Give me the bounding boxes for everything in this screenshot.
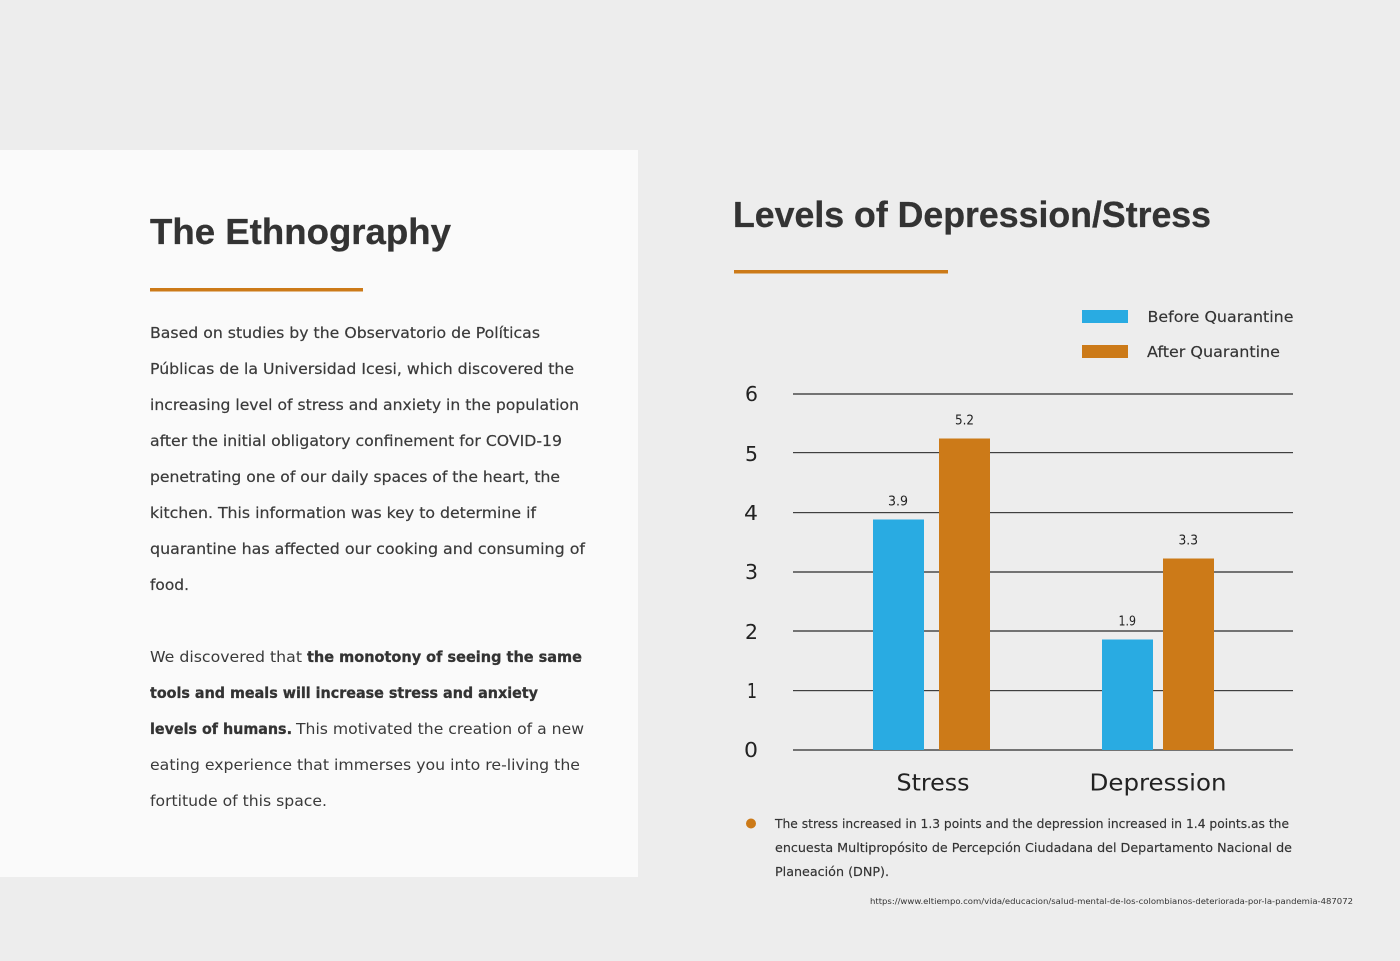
legend: After Quarantine bbox=[1147, 343, 1280, 361]
bars: depression: 3.3 bbox=[1178, 532, 1198, 548]
y axis labels: 4 bbox=[744, 501, 758, 525]
y axis labels: 6 bbox=[745, 382, 758, 406]
text block: first paragraph: Públicas de la Universidad Icesi, which discovered the bbox=[150, 360, 574, 378]
bars: stress: 5.2 bbox=[955, 412, 974, 428]
heading: levels of depression/stress: Levels of Depression/Stress bbox=[733, 194, 1211, 235]
text block: second paragraph: We discovered that bbox=[150, 648, 302, 666]
bars: depression bbox=[1102, 532, 1214, 750]
x axis labels: Depression bbox=[1090, 770, 1226, 796]
text block: first paragraph: quarantine has affected our cooking and consuming of bbox=[150, 540, 586, 558]
heading underline bbox=[150, 288, 363, 292]
text block: second paragraph: This motivated the creation of a new bbox=[295, 720, 584, 738]
bullet note: Planeación (DNP). bbox=[775, 864, 889, 879]
heading: the ethnography: The Ethnography bbox=[150, 211, 451, 252]
text block: second paragraph: the monotony of seeing the same bbox=[307, 648, 582, 666]
x axis labels: Stress bbox=[896, 770, 970, 796]
bullet note: The stress increased in 1.3 points and the depression increased in 1.4 points.as the bbox=[774, 816, 1289, 831]
text block: second paragraph bbox=[150, 648, 584, 810]
text block: second paragraph: fortitude of this space. bbox=[150, 792, 327, 810]
legend bbox=[1082, 308, 1294, 361]
y axis labels bbox=[744, 382, 758, 762]
bars: stress bbox=[873, 412, 990, 750]
y axis labels: 1 bbox=[747, 679, 757, 703]
panel: the ethnography bbox=[0, 150, 638, 877]
y axis labels: 2 bbox=[745, 620, 758, 644]
text block: first paragraph: after the initial obligatory confinement for COVID-19 bbox=[150, 432, 562, 450]
text block: first paragraph: Based on studies by the Observatorio de Políticas bbox=[150, 324, 540, 342]
heading underline bbox=[734, 270, 948, 274]
y axis labels: 5 bbox=[745, 442, 758, 466]
y axis labels: 0 bbox=[744, 738, 758, 762]
text block: first paragraph bbox=[150, 324, 586, 594]
text block: second paragraph: levels of humans. bbox=[150, 720, 292, 738]
y axis labels: 3 bbox=[745, 560, 758, 584]
bars: stress: 3.9 bbox=[888, 494, 908, 510]
bullet note bbox=[746, 816, 1292, 879]
legend: Before Quarantine bbox=[1148, 308, 1294, 326]
source link: https://www.eltiempo.com/vida/educacion/salud-mental-de-los-colombianos-deteriorada-por-la-pandemia-487072 bbox=[870, 897, 1353, 906]
bar chart bbox=[744, 382, 1293, 796]
text block: first paragraph: food. bbox=[150, 576, 189, 594]
text block: first paragraph: increasing level of stress and anxiety in the population bbox=[150, 396, 579, 414]
text block: second paragraph: tools and meals will increase stress and anxiety bbox=[150, 684, 538, 702]
bullet note: encuesta Multipropósito de Percepción Ciudadana del Departamento Nacional de bbox=[775, 840, 1292, 855]
text block: first paragraph: kitchen. This information was key to determine if bbox=[150, 504, 537, 522]
text block: first paragraph: penetrating one of our daily spaces of the heart, the bbox=[150, 468, 560, 486]
x axis labels bbox=[896, 770, 1226, 796]
text block: second paragraph: eating experience that immerses you into re-living the bbox=[150, 756, 580, 774]
bars: depression: 1.9 bbox=[1118, 614, 1136, 630]
